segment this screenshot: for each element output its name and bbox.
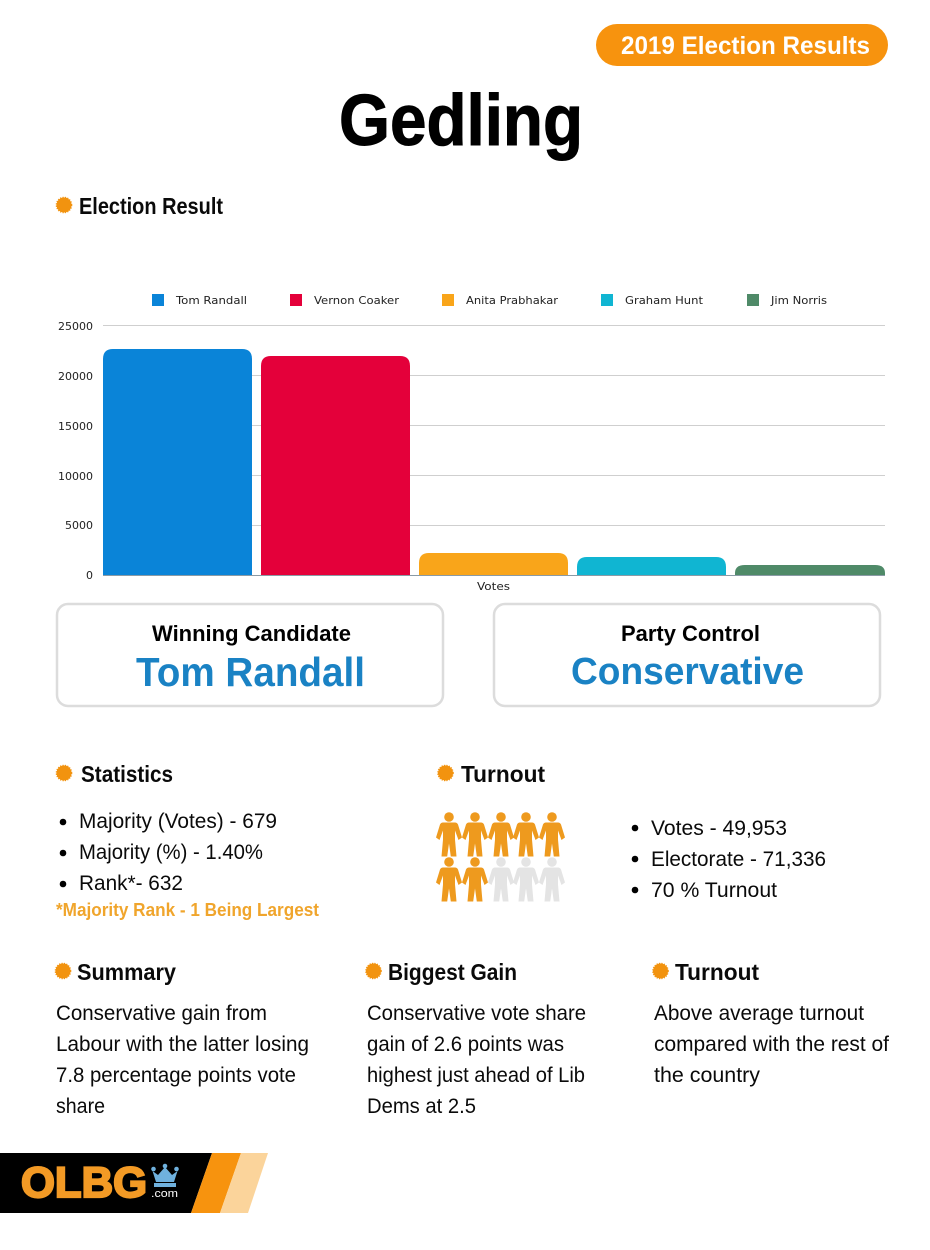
icon: turnout pictogram, 7 of 10 people bbox=[436, 812, 565, 902]
text: turnout summary: compared with the rest of bbox=[654, 1032, 889, 1056]
y axis labels: 25000 bbox=[58, 320, 93, 333]
chart legend: Tom Randall bbox=[175, 294, 247, 307]
text: turnout summary bbox=[654, 1001, 889, 1087]
bar: Jim Norris bbox=[735, 565, 885, 575]
bar chart: votes by candidate bbox=[58, 294, 885, 593]
panel: party control bbox=[494, 604, 880, 706]
badge: 2019 Election Results bbox=[596, 24, 888, 66]
footnote: majority rank: *Majority Rank - 1 Being Largest bbox=[56, 900, 319, 920]
turnout list: Votes - 49,953 bbox=[651, 816, 787, 840]
y axis labels: 0 bbox=[86, 569, 93, 582]
text: summary: Conservative gain from bbox=[56, 1001, 267, 1025]
icon: crown bbox=[151, 1164, 179, 1187]
turnout list: 70 % Turnout bbox=[651, 878, 777, 902]
panel: party control: Conservative bbox=[571, 651, 804, 693]
statistics list: Rank*- 632 bbox=[79, 871, 183, 895]
panel: winning candidate bbox=[57, 604, 443, 706]
heading: Statistics: Statistics bbox=[81, 761, 173, 787]
y axis labels: 5000 bbox=[65, 519, 93, 532]
logo: OLBG.com: .com bbox=[151, 1188, 178, 1200]
text: summary: Labour with the latter losing bbox=[56, 1032, 309, 1056]
text: biggest gain bbox=[367, 1001, 586, 1118]
text: turnout summary: Above average turnout bbox=[654, 1001, 864, 1025]
text: turnout summary: the country bbox=[654, 1063, 760, 1087]
heading: Election Result: Election Result bbox=[79, 193, 223, 219]
heading: Summary: Summary bbox=[77, 959, 176, 985]
heading: Turnout summary: Turnout bbox=[675, 959, 759, 985]
statistics list: Majority (%) - 1.40% bbox=[79, 840, 263, 864]
chart legend: Graham Hunt bbox=[625, 294, 704, 307]
y axis labels: 15000 bbox=[58, 420, 93, 433]
y axis labels bbox=[58, 320, 93, 582]
text: biggest gain: gain of 2.6 points was bbox=[367, 1032, 564, 1056]
bar: Graham Hunt bbox=[577, 557, 726, 575]
text: summary: 7.8 percentage points vote bbox=[56, 1063, 296, 1087]
statistics list bbox=[60, 809, 277, 895]
y axis labels: 10000 bbox=[58, 470, 93, 483]
panel: winning candidate: Tom Randall bbox=[136, 649, 365, 695]
text: summary bbox=[56, 1001, 309, 1118]
panel: party control: Party Control bbox=[621, 621, 760, 646]
x axis label: Votes bbox=[477, 580, 510, 593]
turnout list: Electorate - 71,336 bbox=[651, 847, 826, 871]
statistics list: Majority (Votes) - 679 bbox=[79, 809, 277, 833]
text: summary: share bbox=[56, 1094, 105, 1118]
bar: Tom Randall bbox=[103, 349, 252, 575]
text: biggest gain: Dems at 2.5 bbox=[367, 1094, 476, 1118]
chart legend: Jim Norris bbox=[770, 294, 827, 307]
bar: Vernon Coaker bbox=[261, 356, 410, 575]
panel: winning candidate: Winning Candidate bbox=[152, 621, 351, 646]
logo: OLBG.com bbox=[0, 1153, 268, 1213]
logo: OLBG.com: OLBG bbox=[21, 1159, 147, 1207]
chart legend bbox=[152, 294, 827, 307]
badge: 2019 Election Results: 2019 Election Results bbox=[621, 32, 870, 60]
heading: Turnout: Turnout bbox=[461, 761, 545, 787]
chart legend: Anita Prabhakar bbox=[466, 294, 558, 307]
bar: Anita Prabhakar bbox=[419, 553, 568, 575]
y axis labels: 20000 bbox=[58, 370, 93, 383]
heading: Biggest Gain: Biggest Gain bbox=[388, 959, 517, 985]
text: biggest gain: Conservative vote share bbox=[367, 1001, 586, 1025]
text: biggest gain: highest just ahead of Lib bbox=[367, 1063, 585, 1087]
chart legend: Vernon Coaker bbox=[314, 294, 400, 307]
turnout list bbox=[632, 816, 826, 902]
title: Gedling bbox=[339, 81, 583, 161]
